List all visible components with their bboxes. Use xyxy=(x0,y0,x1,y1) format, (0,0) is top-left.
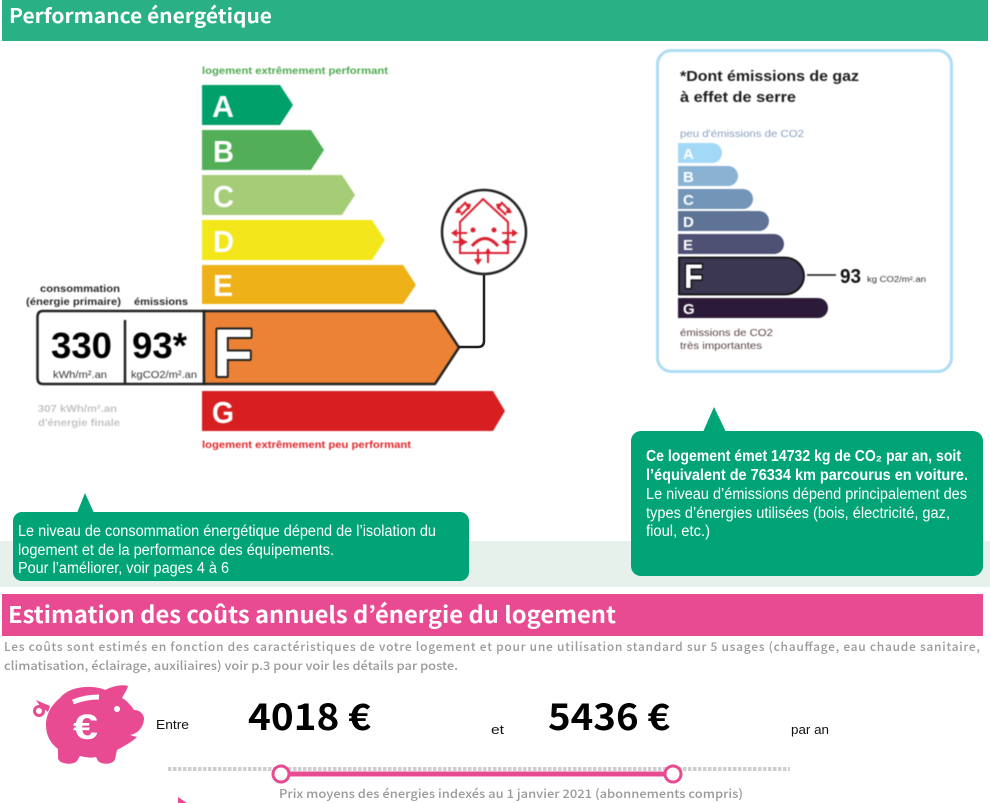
heading: annual cost estimate xyxy=(2,594,983,636)
icon: piggy bank with euro xyxy=(34,685,144,764)
CO2 band C xyxy=(678,189,753,209)
label: extremely inefficient: logement extrêmement peu performant xyxy=(202,439,412,451)
CO2 band B xyxy=(678,166,738,186)
label: low emissions: peu d'émissions de CO2 xyxy=(680,128,804,140)
cost range values: 5436 € xyxy=(548,689,670,741)
consumption column labels xyxy=(26,283,188,308)
band G xyxy=(202,391,505,431)
band G: G xyxy=(212,395,234,430)
callout: energy consumption: Le niveau de consommation énergétique dépend de l’isolation du xyxy=(18,523,436,540)
current rating: values box and F band: 330 xyxy=(51,325,112,366)
cost range values: Entre xyxy=(156,718,189,732)
cost range values xyxy=(156,689,829,741)
CO2 band C: C xyxy=(683,192,694,209)
connector line to passoire icon xyxy=(459,275,484,347)
label: high emissions: très importantes xyxy=(680,340,762,352)
callout: CO2 emissions: l’équivalent de 76334 km parcourus en voiture. xyxy=(646,467,968,484)
cost range slider xyxy=(168,766,790,782)
callout: energy consumption: logement et de la performance des équipements. xyxy=(18,542,334,559)
band B xyxy=(202,130,324,170)
CO2 band B: B xyxy=(683,169,694,186)
callout: energy consumption xyxy=(13,493,469,581)
band B: B xyxy=(213,134,234,169)
consumption column labels: (énergie primaire) xyxy=(26,296,121,308)
band C xyxy=(202,175,355,215)
final energy note: 307 kWh/m².an xyxy=(38,403,117,415)
CO2 band E xyxy=(678,234,784,254)
label: high emissions: émissions de CO2 xyxy=(680,327,773,339)
CO2 band D xyxy=(678,211,769,231)
CO2 band F, current xyxy=(679,258,804,296)
current rating: values box and F band: 93* xyxy=(132,325,187,366)
panel title: *Dont émissions de gaz xyxy=(680,68,859,85)
callout: energy consumption: Pour l’améliorer, voir pages 4 à 6 xyxy=(18,560,229,577)
cost range values: 4018 € xyxy=(248,689,371,741)
current rating: values box and F band: F xyxy=(213,315,253,391)
band C: C xyxy=(213,179,234,214)
CO2 band E: E xyxy=(683,237,693,254)
callout: CO2 emissions xyxy=(631,407,983,576)
CO2 band A: A xyxy=(683,146,694,163)
CO2 value callout: 93 xyxy=(840,266,861,288)
intro text: Les coûts sont estimés en fonction des caractéristiques de votre logement et pour une utilisation standard sur 5 usages (chauffage, eau chaude sanitaire, xyxy=(4,638,980,655)
price note: Prix moyens des énergies indexés au 1 janvier 2021 (abonnements compris) xyxy=(279,785,743,802)
heading: Performance énergétique xyxy=(2,0,988,41)
band A: A xyxy=(212,89,234,124)
final energy note: d'énergie finale xyxy=(38,417,120,429)
panel title: à effet de serre xyxy=(680,89,796,106)
callout: CO2 emissions: Ce logement émet 14732 kg de CO₂ par an, soit xyxy=(646,448,961,465)
icon: sad house with heat loss xyxy=(442,190,526,274)
panel: greenhouse gas emissions xyxy=(658,50,952,372)
panel title xyxy=(680,68,859,106)
current rating: values box and F band: kWh/m².an xyxy=(53,369,107,381)
band D xyxy=(202,220,385,260)
callout: CO2 emissions: types d’énergies utilisées (bois, électricité, gaz, xyxy=(646,505,950,522)
CO2 value callout xyxy=(807,266,926,288)
consumption column labels: émissions xyxy=(134,296,188,308)
cost range values: par an xyxy=(791,723,829,737)
pink arrow marker xyxy=(178,797,187,803)
callout: CO2 emissions: Le niveau d’émissions dépend principalement des xyxy=(646,486,967,503)
label: extremely efficient: logement extrêmement performant xyxy=(202,65,389,77)
heading: annual cost estimate: Estimation des coûts annuels d’énergie du logement xyxy=(8,596,616,630)
band E xyxy=(202,265,416,304)
cost range values: et xyxy=(491,723,505,737)
icon: piggy bank with euro: € xyxy=(73,708,98,747)
CO2 value callout: kg CO2/m².an xyxy=(867,275,926,284)
CO2 band A xyxy=(678,143,722,163)
callout: CO2 emissions: fioul, etc.) xyxy=(646,523,710,540)
intro text: climatisation, éclairage, auxiliaires) voir p.3 pour voir les détails par poste. xyxy=(4,657,458,674)
heading: Performance énergétique: Performance énergétique xyxy=(9,0,272,29)
CO2 band F, current: F xyxy=(684,258,703,296)
band A xyxy=(202,85,293,125)
consumption column labels: consommation xyxy=(40,283,120,295)
CO2 band D: D xyxy=(683,214,694,231)
current rating: values box and F band xyxy=(38,311,459,391)
intro text xyxy=(4,638,980,674)
current rating: values box and F band: kgCO2/m².an xyxy=(131,369,197,381)
band E: E xyxy=(213,268,233,303)
CO2 band G: G xyxy=(683,301,695,318)
final energy note xyxy=(38,403,120,429)
label: high emissions xyxy=(680,327,773,352)
CO2 band G xyxy=(678,298,828,318)
band D: D xyxy=(213,224,234,259)
energy rating scale A to G xyxy=(202,65,505,451)
